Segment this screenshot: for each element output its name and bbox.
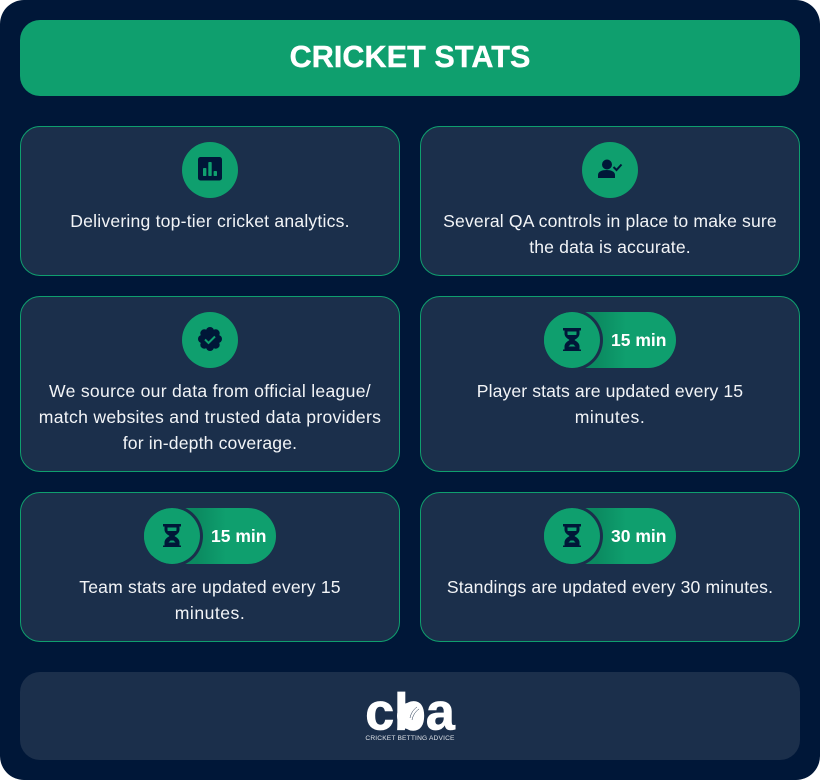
title banner: CRICKET STATS [290,40,530,74]
badge: 15 min [544,312,676,368]
text: data sources [39,381,381,453]
badge: 15 min [144,508,276,564]
text: QA controls [443,211,777,257]
panel: analytics [20,126,400,276]
icon: bar chart [182,142,238,198]
icon: verified badge [182,312,238,368]
label: 15 min: 15 min [611,330,666,350]
panel: team stats [20,492,400,642]
text: data sources: for in-depth coverage. [123,433,297,453]
text: QA controls: Several QA controls in place to make sure [443,211,777,231]
text: team stats: minutes. [175,603,245,623]
text: data sources: We source our data from official league/ [49,381,371,401]
text: standings: Standings are updated every 30 minutes. [447,577,773,597]
panel: data sources [20,296,400,472]
icon: hourglass [163,524,181,547]
logo: Cricket Betting Advice: cba [365,684,456,742]
icon: hourglass [563,328,581,351]
label: 30 min: 30 min [611,526,666,546]
icon: hourglass [563,524,581,547]
text: player stats [477,381,743,427]
text: team stats: Team stats are updated every 15 [79,577,341,597]
text: data sources: match websites and trusted data providers [39,407,381,427]
text: analytics: Delivering top-tier cricket analytics. [70,211,350,231]
text: QA controls: the data is accurate. [529,237,691,257]
text: player stats: Player stats are updated every 15 [477,381,743,401]
icon: user with check [582,142,638,198]
text: player stats: minutes. [575,407,645,427]
footer panel [20,672,800,760]
logo: Cricket Betting Advice: CRICKET BETTING ADVICE [365,735,455,742]
panel: QA controls [420,126,800,276]
panel: player stats [420,296,800,472]
label: 15 min: 15 min [211,526,266,546]
text: team stats [79,577,341,623]
badge: 30 min [544,508,676,564]
title banner [20,20,800,96]
panel: standings [420,492,800,642]
